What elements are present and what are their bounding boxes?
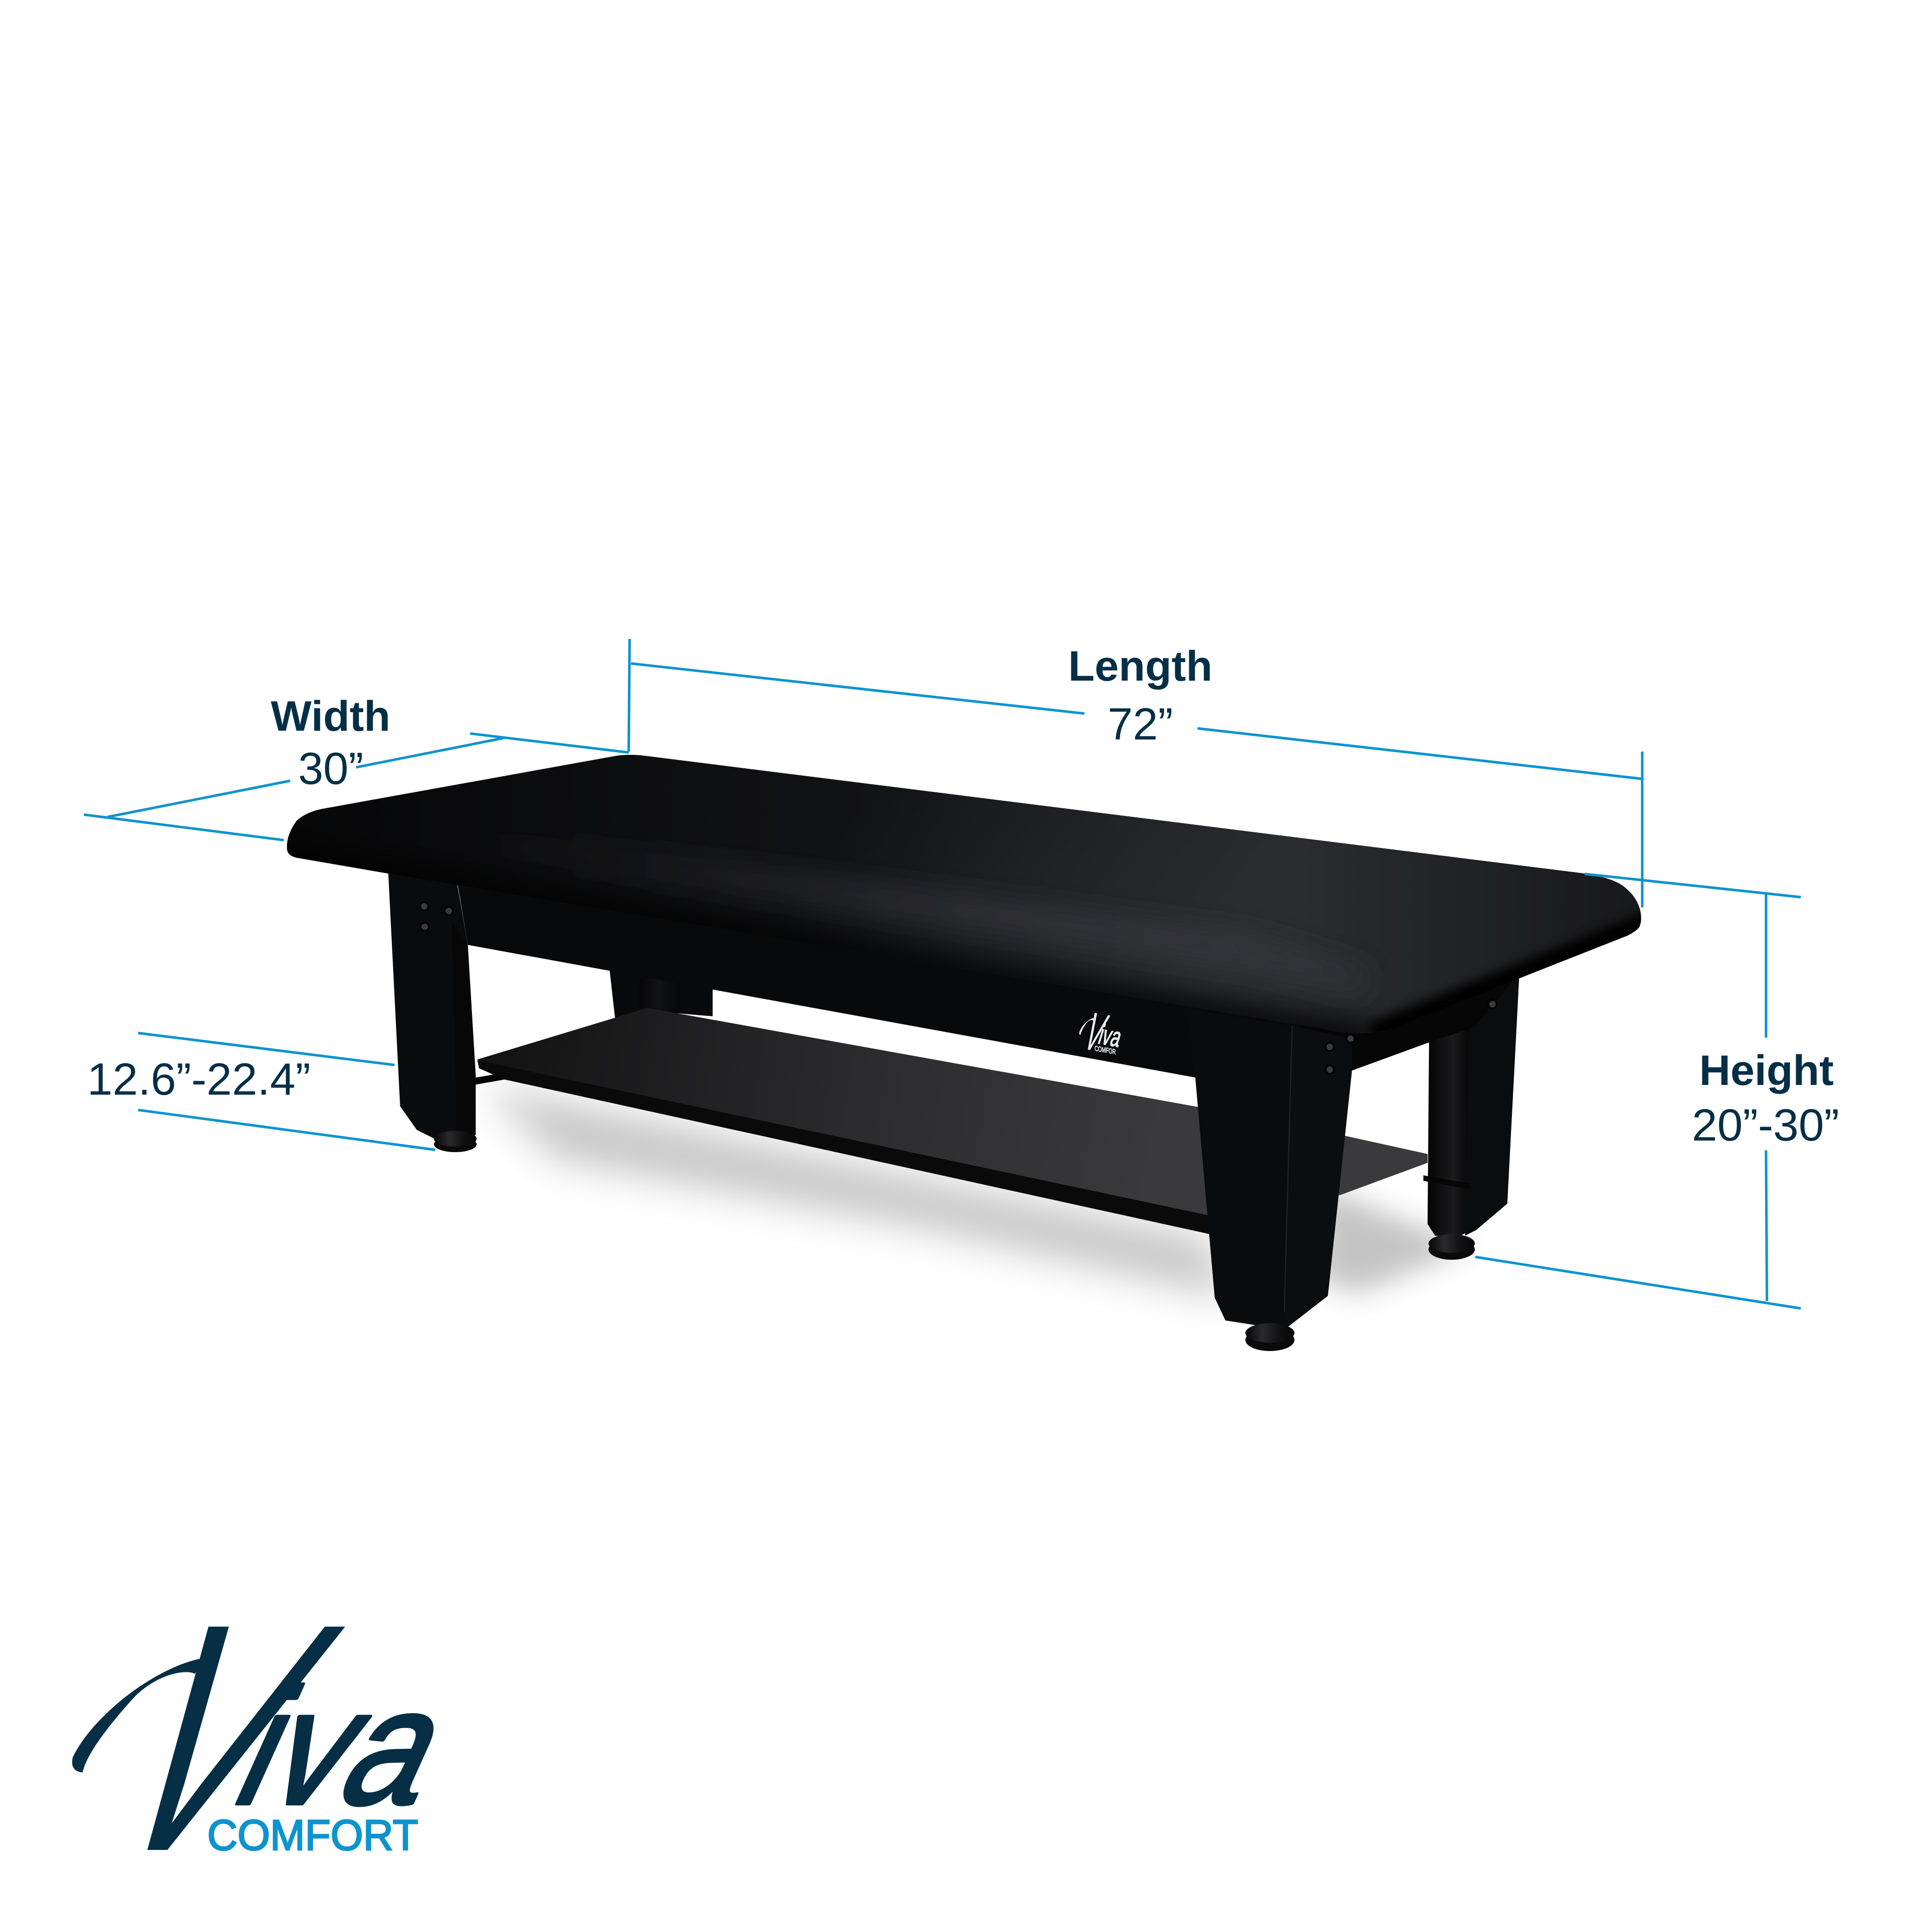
rear right leg column — [1428, 997, 1474, 1238]
clearance value: 12.6”-22.4” — [87, 1054, 311, 1104]
table: front right leg — [1187, 974, 1519, 1351]
side rail — [1292, 974, 1519, 1071]
table: front left leg — [388, 869, 505, 1152]
leg panel — [388, 869, 476, 1139]
screws — [1326, 1000, 1497, 1074]
screws — [420, 902, 453, 931]
floor shadow — [482, 1085, 1470, 1298]
rail screws — [1195, 1040, 1240, 1079]
dimension: height — [1475, 874, 1839, 1308]
height label: Height — [1699, 1047, 1834, 1094]
height value: 20”-30” — [1692, 1100, 1839, 1150]
side rim shadow — [1372, 925, 1651, 1036]
foot — [1245, 1323, 1294, 1351]
top surface right shading — [1369, 847, 1641, 990]
width measure lines — [108, 738, 503, 817]
rim highlight — [666, 864, 1256, 955]
table: back leg — [609, 967, 713, 1020]
leg main face — [1187, 1008, 1292, 1330]
rear right leg panel — [1465, 974, 1519, 1236]
shelf front edge — [478, 1060, 1210, 1234]
small logo on rail — [1077, 998, 1126, 1068]
length label: Length — [1068, 643, 1212, 690]
logo script letter V: V — [51, 1556, 385, 1919]
connector bar — [474, 1072, 505, 1085]
height extension lines — [1475, 874, 1801, 1308]
table: front rail — [457, 879, 1352, 1079]
dimension: shelf clearance — [87, 1033, 435, 1150]
crease — [1284, 1026, 1292, 1312]
clearance lines — [138, 1033, 435, 1150]
height measure lines — [1766, 894, 1767, 1301]
rear right foot — [1428, 1234, 1475, 1260]
leg outer face — [1284, 1026, 1352, 1330]
column — [452, 923, 476, 1137]
connector bar — [1423, 1175, 1470, 1189]
shelf top surface — [478, 1008, 1428, 1217]
width value: 30” — [298, 743, 363, 794]
logo wordmark comfort: COMFORT — [207, 1811, 418, 1859]
top surface left shading — [287, 755, 877, 885]
logo script letters iva: iva — [211, 1654, 480, 1838]
dimension: length — [629, 639, 1643, 907]
logo flourish — [72, 1658, 207, 1773]
table: padded top — [287, 755, 1641, 1033]
dimension: width — [84, 693, 629, 840]
table: rear right leg — [1423, 974, 1519, 1260]
width extension lines — [84, 733, 629, 840]
small logo on rail: iva — [1095, 1020, 1126, 1053]
small logo on rail: COMFOR — [1095, 1044, 1116, 1056]
table: lower shelf — [478, 1008, 1428, 1234]
front rim shadow — [278, 858, 1372, 1039]
foot — [434, 1131, 477, 1152]
brand logo — [51, 1556, 480, 1919]
length extension lines — [629, 639, 1642, 907]
small logo on rail: V — [1077, 1002, 1115, 1062]
length measure lines — [631, 663, 1643, 779]
length value: 72” — [1108, 699, 1173, 749]
width label: Width — [271, 693, 390, 740]
